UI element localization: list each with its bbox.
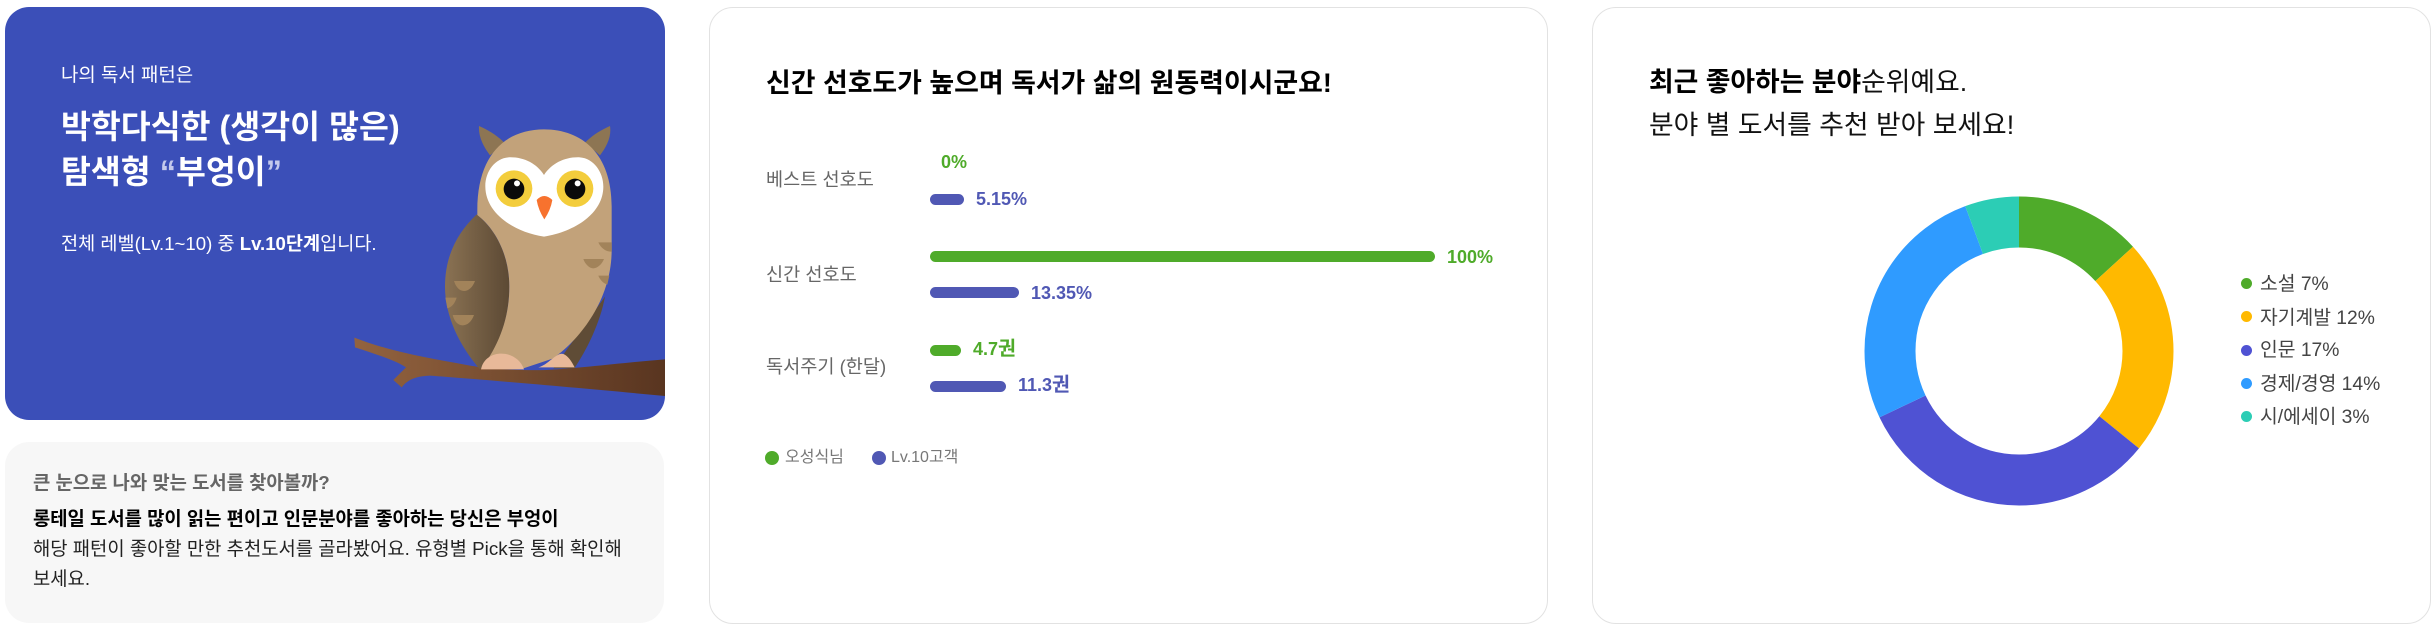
legend dot: business	[2241, 378, 2252, 389]
legend dot: poetry	[2241, 411, 2252, 422]
legend text: fiction: 소설 7%	[2260, 274, 2329, 295]
heading: favourite genres	[1649, 67, 2014, 140]
legend: genres	[2241, 278, 2252, 422]
bar: monthly reading reader	[930, 345, 961, 356]
text: note body	[33, 538, 622, 589]
value: new book preference reader: 100%	[1447, 247, 1493, 267]
text: note body: 보세요.	[33, 568, 90, 589]
text: card intro: 나의 독서 패턴은	[61, 65, 193, 86]
legend text: reader: 오성식님	[785, 449, 844, 466]
value: monthly reading reader: 4.7권	[973, 338, 1016, 360]
donut chart: genres	[1864, 196, 2174, 506]
legend dot: reader	[765, 451, 779, 465]
panel: owl reading type card	[5, 7, 665, 420]
value: monthly reading group: 11.3권	[1018, 374, 1070, 396]
bar: monthly reading group	[930, 381, 1006, 392]
heading: favourite genres: 최근 좋아하는 분야순위예요.	[1649, 67, 1967, 97]
legend dot: group	[872, 451, 886, 465]
legend text: poetry: 시/에세이 3%	[2260, 407, 2370, 428]
heading: reading type: 탐색형 “부엉이”	[61, 154, 282, 190]
heading: preference comparison: 신간 선호도가 높으며 독서가 삶의 원동력이시군요!	[766, 68, 1332, 98]
text: note emphasis: 롱테일 도서를 많이 읽는 편이고 인문분야를 좋아하는 당신은 부엉이	[33, 508, 559, 529]
bar: best preference group	[930, 194, 964, 205]
heading: favourite genres: 분야 별 도서를 추천 받아 보세요!	[1649, 110, 2014, 140]
legend text: business: 경제/경영 14%	[2260, 374, 2380, 395]
label: monthly reading: 독서주기 (한달)	[766, 356, 886, 377]
legend dot: humanities	[2241, 345, 2252, 356]
text: note body: 해당 패턴이 좋아할 만한 추천도서를 골라봤어요. 유형별 Pick을 통해 확인해	[33, 538, 622, 559]
legend text: group: Lv.10고객	[891, 449, 958, 466]
label: new book preference: 신간 선호도	[766, 264, 857, 285]
panel: recommendation note	[5, 442, 664, 623]
bar: new book preference reader	[930, 251, 1435, 262]
bar: new book preference group	[930, 287, 1019, 298]
text: level note: 전체 레벨(Lv.1~10) 중 Lv.10단계입니다.	[61, 233, 377, 254]
value: best preference group: 5.15%	[976, 189, 1027, 209]
value: new book preference group: 13.35%	[1031, 283, 1092, 303]
panel: preference comparison	[709, 7, 1548, 624]
legend text: self-development: 자기계발 12%	[2260, 308, 2375, 329]
legend dot: self-development	[2241, 311, 2252, 322]
label: best preference: 베스트 선호도	[766, 169, 874, 190]
illustration: owl on a branch	[354, 126, 665, 396]
legend dot: fiction	[2241, 278, 2252, 289]
text: note question: 큰 눈으로 나와 맞는 도서를 찾아볼까?	[33, 472, 330, 493]
heading: reading type	[61, 109, 400, 190]
heading: reading type: 박학다식한 (생각이 많은)	[61, 109, 400, 145]
legend: bar chart	[765, 448, 958, 466]
value: best preference reader: 0%	[941, 152, 967, 172]
legend text: humanities: 인문 17%	[2260, 340, 2339, 361]
panel: favourite genres	[1592, 7, 2431, 624]
